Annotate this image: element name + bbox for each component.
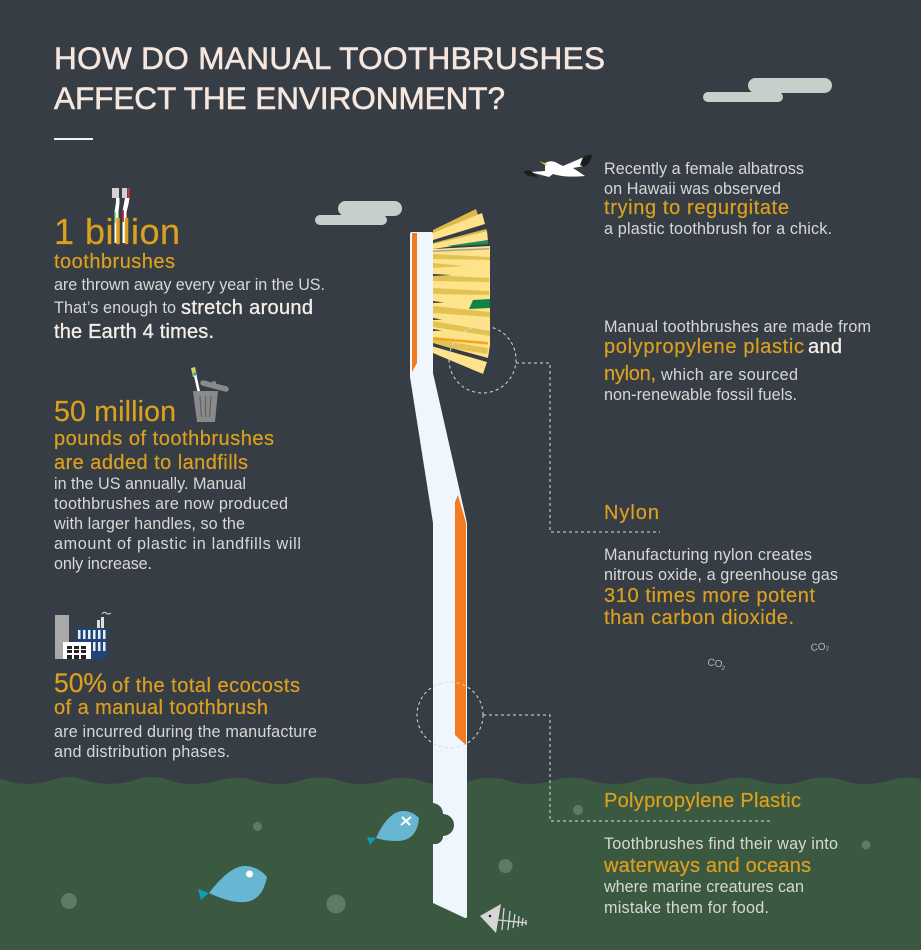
text: polypropylene: waterways and oceans [603,855,811,877]
icon: fish skeleton [480,904,527,933]
stat: 50 million: toothbrushes are now produced [54,495,288,513]
icon: CO2 left: CO [706,657,723,671]
stat: 50 percent: of a manual toothbrush [54,697,268,719]
stat: 50 million: only increase. [54,555,152,573]
orange stripe: head [412,233,417,372]
text: materials: non-renewable fossil fuels. [604,386,797,404]
stat: 1 billion: the Earth 4 times. [54,321,214,343]
text: materials: and [808,336,842,358]
callout line: nylon [449,326,660,532]
text: albatross: on Hawaii was observed [604,180,781,198]
text: polypropylene [603,790,838,917]
text: nylon: Nylon [604,502,659,524]
text: materials: which are sourced [660,366,798,384]
icon: large fish [198,866,267,902]
text: materials: polypropylene plastic [604,336,804,358]
text: nylon: nitrous oxide, a greenhouse gas [604,566,838,584]
icon: CO2 right: CO [810,641,826,654]
stat: 50 percent [54,668,317,761]
callout line: polypropylene [417,682,770,821]
text: nylon [604,502,838,629]
toothbrush illustration [410,209,490,918]
handle [410,232,467,918]
text: polypropylene: mistake them for food. [604,899,769,917]
text: albatross: trying to regurgitate [604,197,789,219]
stat: 1 billion [54,211,325,343]
text: polypropylene: Polypropylene Plastic [604,790,801,812]
bristles [433,209,490,374]
stat: 1 billion: are thrown away every year in the US. [54,276,325,294]
icon: two toothbrushes [112,188,130,243]
orange stripe: handle [455,495,466,745]
icon: factory [55,612,111,659]
cloud: top right [703,78,832,102]
icon: dead fish [367,811,419,845]
stat: 50 percent: of the total ecocosts [112,675,300,697]
stat: 50 percent: 50% [54,668,107,698]
title [54,40,605,116]
text: polypropylene: Toothbrushes find their way into [604,835,838,853]
stat: 50 million: are added to landfills [54,452,248,474]
stat: 50 million [53,396,301,573]
stat: 50 million: in the US annually. Manual [54,475,246,493]
stat: 1 billion: That’s enough to [54,299,176,317]
text: nylon: than carbon dioxide. [604,607,794,629]
icon: albatross [523,155,592,177]
cloud: left of brush [315,201,402,225]
text: polypropylene: where marine creatures can [603,878,804,896]
stat: 1 billion: 1 billion [54,211,180,252]
text: materials: Manual toothbrushes are made from [604,318,871,336]
stat: 50 million: amount of plastic in landfills will [54,535,301,553]
text: materials: nylon, [604,363,656,385]
stat: 50 percent: and distribution phases. [54,743,230,761]
stat: 50 million: pounds of toothbrushes [54,428,274,450]
icon: trash can with toothbrush [191,367,226,422]
icon: CO2 left: 2 [721,666,726,672]
text: materials [604,318,871,404]
title: AFFECT THE ENVIRONMENT? [54,80,505,116]
text: nylon: Manufacturing nylon creates [604,546,812,564]
icon: CO2 right: 2 [826,646,830,652]
stat: 50 million: 50 million [54,396,176,428]
water [0,777,921,950]
text: albatross [604,160,832,238]
bubbles [61,805,870,914]
stat: 50 million: with larger handles, so the [53,515,245,533]
stat: 1 billion: stretch around [181,297,313,319]
text: albatross: Recently a female albatross [604,160,804,178]
stat: 50 percent: are incurred during the manufacture [54,723,317,741]
dark bristle wedges [433,254,490,354]
text: albatross: a plastic toothbrush for a chick. [604,220,832,238]
text: nylon: 310 times more potent [604,585,815,607]
stat: 1 billion: toothbrushes [54,251,175,273]
title: HOW DO MANUAL TOOTHBRUSHES [54,40,605,76]
